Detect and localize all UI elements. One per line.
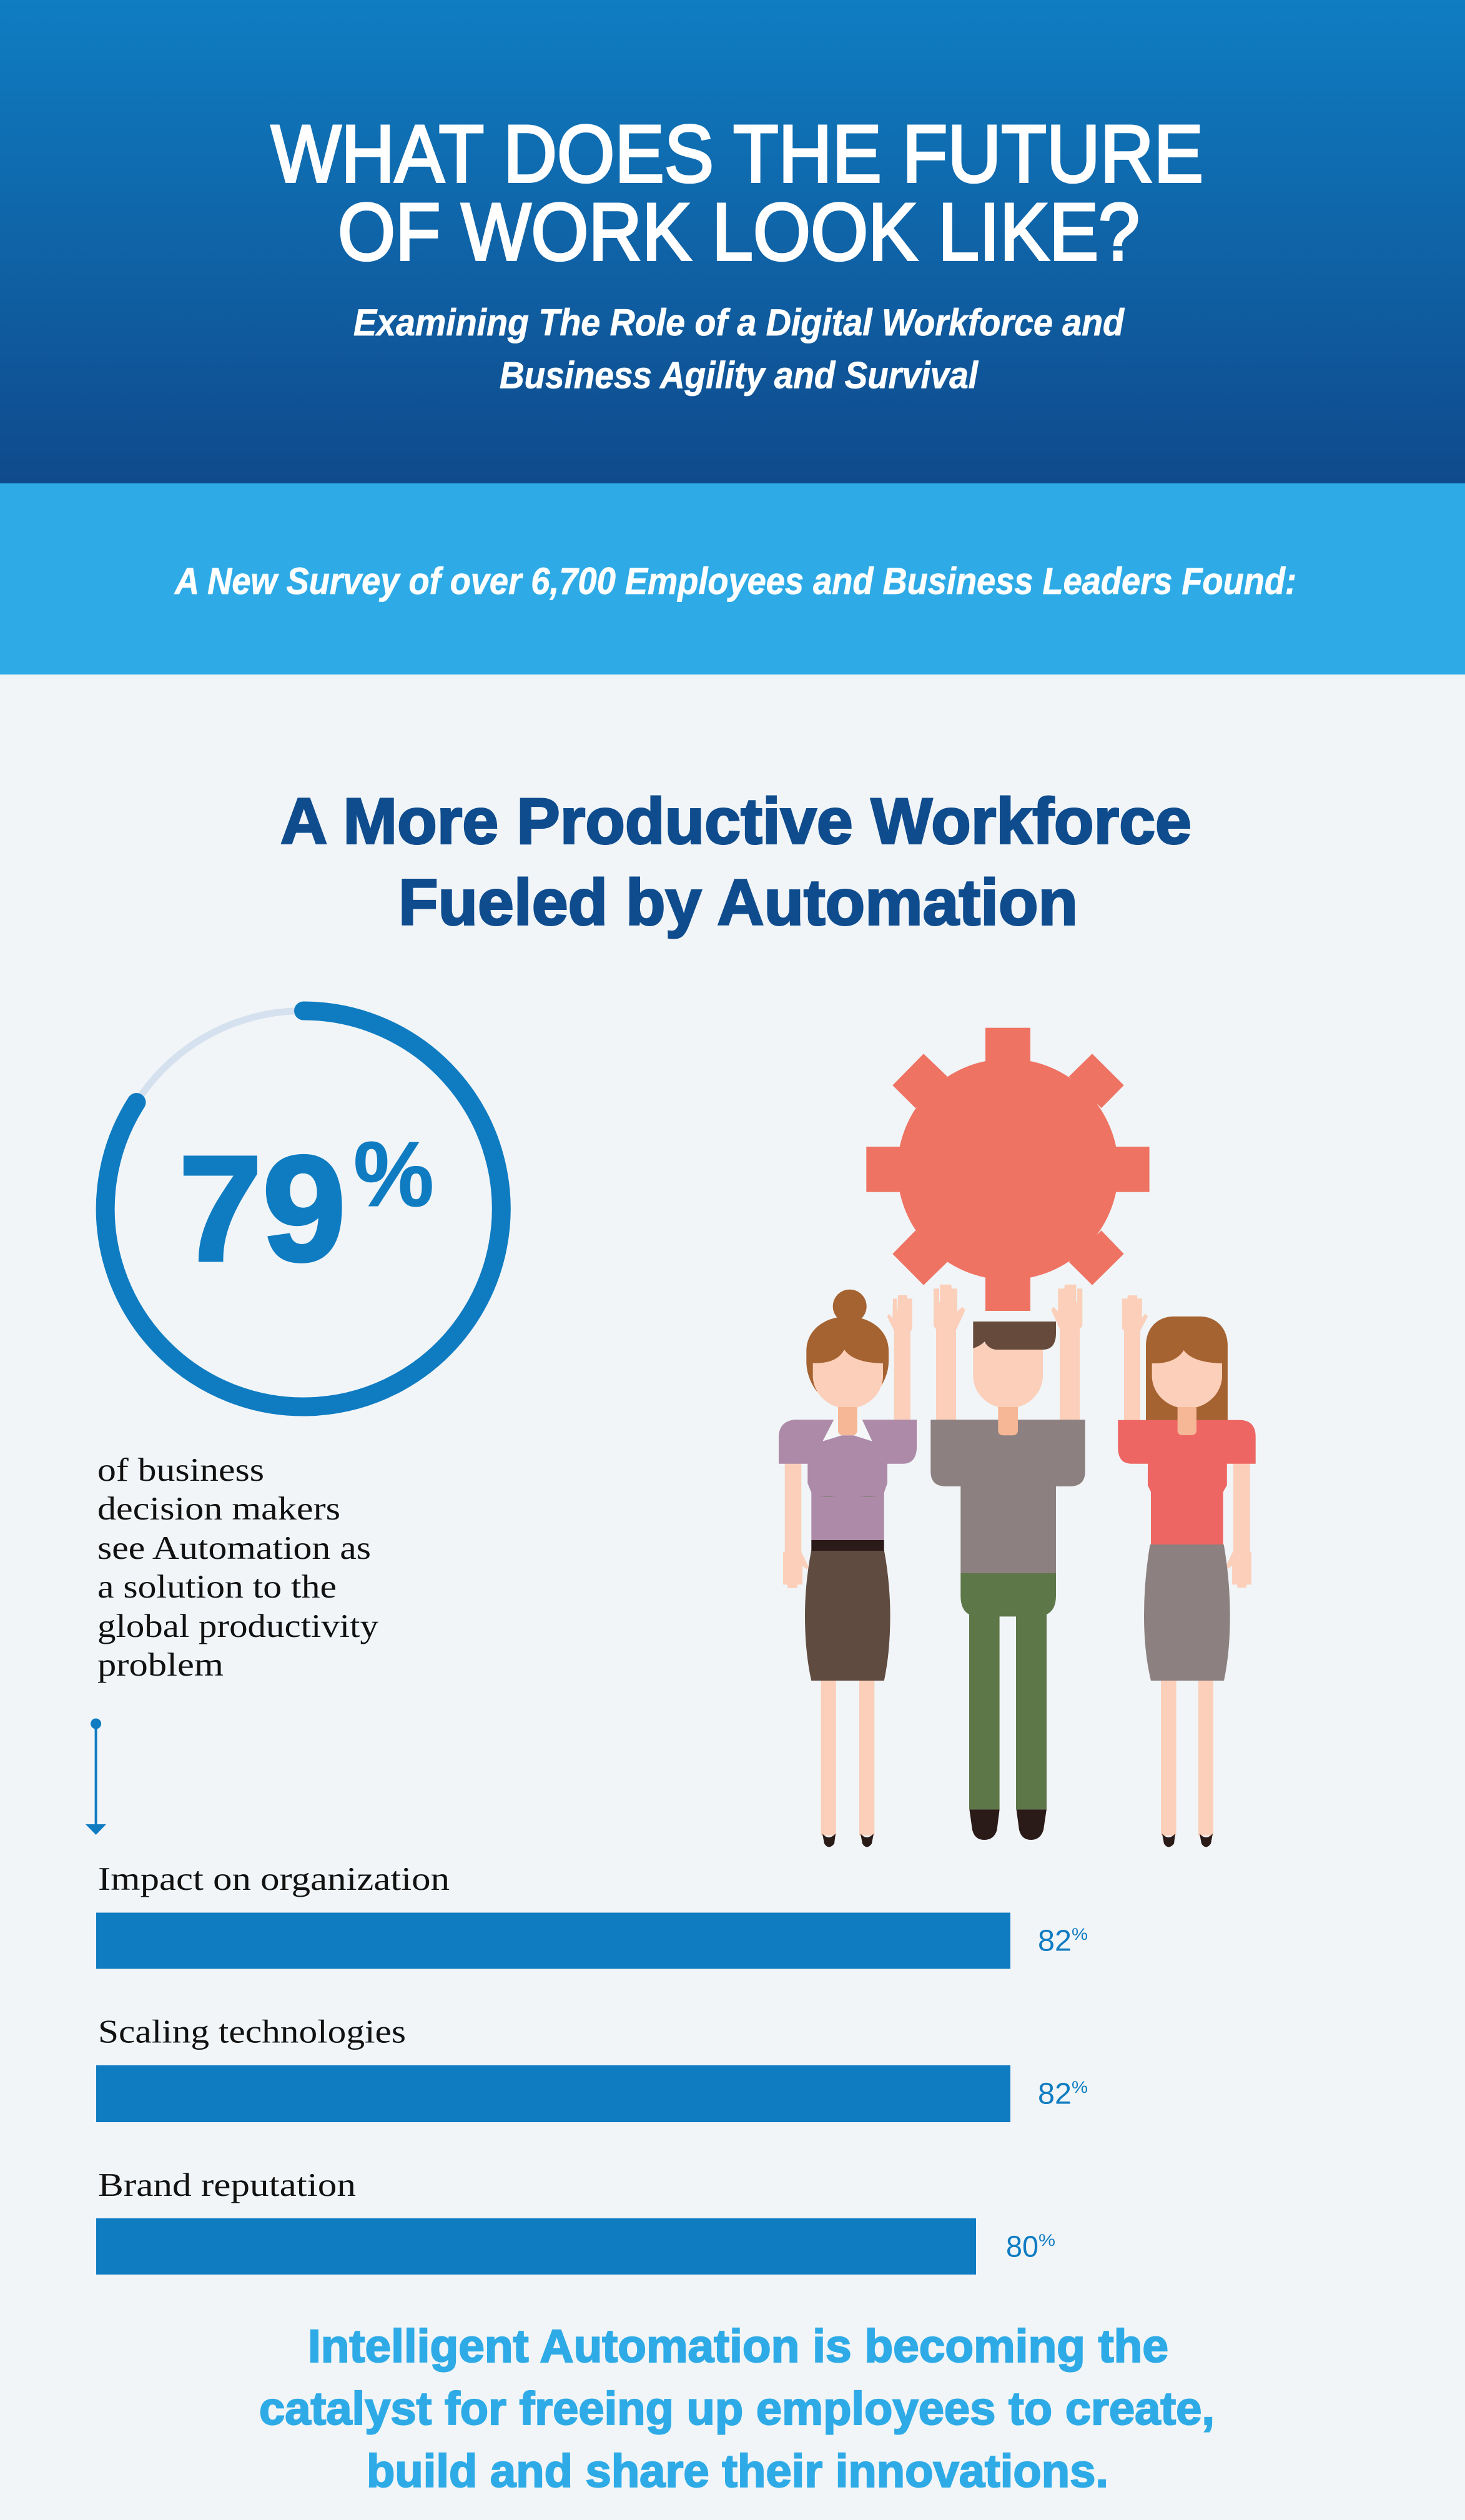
woman in purple blouse xyxy=(779,1290,917,1847)
closing statement: build and share their innovations. xyxy=(367,2445,1108,2497)
subtitle xyxy=(353,302,1125,396)
bar: brand reputation: Brand reputation xyxy=(98,2167,356,2203)
survey banner xyxy=(0,483,1465,674)
survey banner: A New Survey of over 6,700 Employees and Business Leaders Found: xyxy=(174,560,1296,602)
arrow down xyxy=(86,1719,106,1835)
stat value xyxy=(179,1123,434,1292)
subtitle: Examining The Role of a Digital Workforce and xyxy=(353,302,1125,343)
stat description: see Automation as xyxy=(97,1530,371,1566)
bar: brand reputation: % xyxy=(1038,2231,1055,2250)
closing statement: catalyst for freeing up employees to create, xyxy=(259,2383,1215,2434)
stat description: global productivity xyxy=(97,1608,379,1644)
bar: impact on organization: Impact on organization xyxy=(98,1861,450,1897)
bar: brand reputation: 80 xyxy=(1006,2230,1038,2263)
stat description: of business xyxy=(97,1452,264,1488)
closing statement: Intelligent Automation is becoming the xyxy=(308,2320,1168,2372)
stat description xyxy=(97,1452,379,1683)
bar: impact on organization xyxy=(96,1861,1088,1969)
bar: scaling technologies: % xyxy=(1072,2078,1088,2097)
man in grey shirt xyxy=(930,1285,1085,1840)
donut chart: 79 percent xyxy=(106,1010,501,1406)
stat value: % xyxy=(353,1123,434,1226)
section heading: Fueled by Automation xyxy=(398,867,1078,939)
stat description: a solution to the xyxy=(97,1569,337,1605)
closing statement xyxy=(259,2320,1215,2497)
stat value: 79 xyxy=(179,1125,346,1292)
title xyxy=(271,108,1203,277)
bar: brand reputation xyxy=(96,2167,1055,2275)
section heading xyxy=(280,786,1191,939)
bar: scaling technologies: 82 xyxy=(1038,2078,1072,2111)
icon: gear xyxy=(866,1028,1150,1311)
bar: impact on organization: % xyxy=(1072,1925,1088,1944)
stat description: decision makers xyxy=(97,1491,340,1527)
header panel xyxy=(0,0,1465,483)
bar: impact on organization: 82 xyxy=(1038,1925,1072,1958)
bar: scaling technologies: Scaling technologies xyxy=(98,2014,406,2050)
section heading: A More Productive Workforce xyxy=(280,786,1191,858)
title: WHAT DOES THE FUTURE xyxy=(271,108,1203,199)
bar chart xyxy=(96,1861,1088,2275)
subtitle: Business Agility and Survival xyxy=(500,355,979,396)
stat description: problem xyxy=(97,1647,224,1683)
title: OF WORK LOOK LIKE? xyxy=(338,186,1140,277)
bar: scaling technologies xyxy=(96,2014,1088,2122)
woman in red shirt xyxy=(1118,1295,1256,1847)
illustration: people and gear xyxy=(779,1028,1256,1847)
